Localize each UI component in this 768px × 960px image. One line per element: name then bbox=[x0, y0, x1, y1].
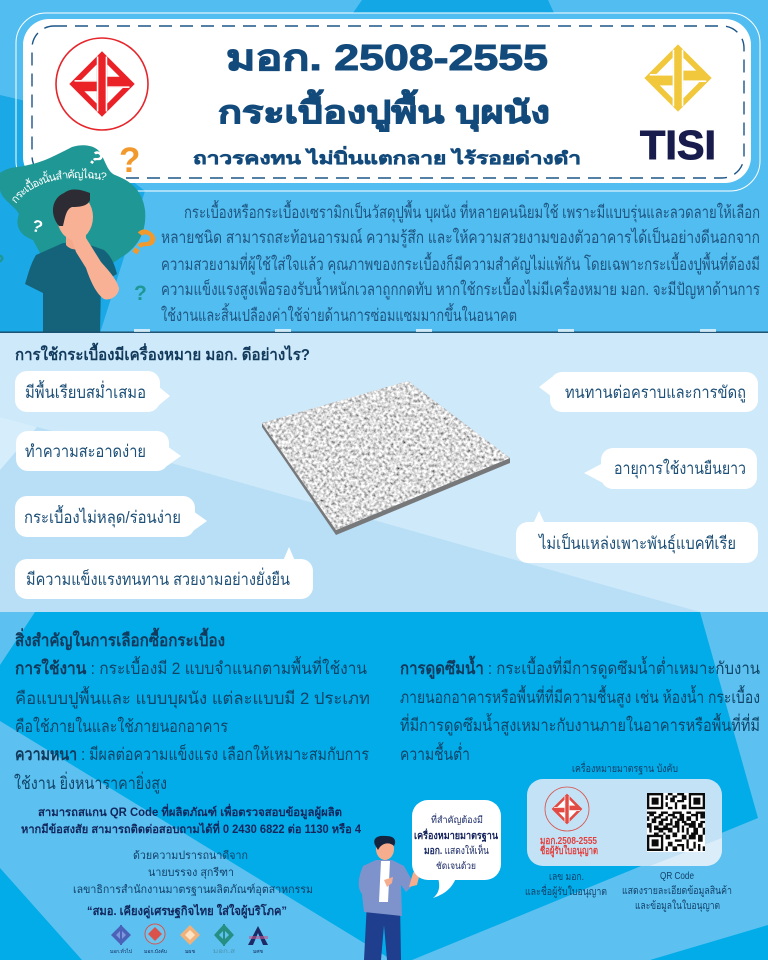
callout: not loose bbox=[15, 496, 207, 537]
text: water absorption: ความชื้นต่ำ bbox=[400, 742, 470, 764]
text: contact: สามารถสแกน QR Code ที่ผลิตภัณฑ์ เพื่อตรวจสอบข้อมูลผู้ผลิต bbox=[38, 803, 342, 820]
title bbox=[193, 37, 581, 168]
logo: mandatory mark in panel bbox=[545, 787, 589, 831]
logo: tower mark: มศช bbox=[253, 949, 264, 955]
logo: optional standard bbox=[110, 925, 132, 955]
licence text: ชื่อผู้รับใบอนุญาต bbox=[540, 843, 598, 858]
callout: no bacteria: ไม่เป็นแหล่งเพาะพันธุ์แบคทีเรีย bbox=[537, 532, 736, 554]
text: usage and thickness: การใช้งาน : กระเบื้องมี 2 แบบจำแนกตามพื้นที่ใช้งาน bbox=[15, 656, 367, 678]
pointing hand bbox=[409, 866, 420, 887]
image: terrazzo tile bbox=[255, 375, 517, 535]
logo: community standard bbox=[180, 925, 200, 955]
logo: mandatory standard bbox=[144, 924, 167, 955]
text: water absorption bbox=[400, 655, 760, 764]
panel: mark and QR code bbox=[527, 779, 722, 866]
text: signature: นายบรรจง สุกรีฑา bbox=[148, 866, 234, 879]
caption: licence number: และชื่อผู้รับใบอนุญาต bbox=[525, 884, 607, 898]
illustration: presenter man bbox=[359, 836, 420, 960]
text: contact: หากมีข้อสงสัย สามารถติดต่อสอบถามได้ที่ 0 2430 6822 ต่อ 1130 หรือ 4 bbox=[21, 820, 362, 836]
title: กระเบื้องปูพื้น บุผนัง bbox=[218, 89, 550, 132]
caption: QR code: และข้อมูลในใบอนุญาต bbox=[635, 899, 720, 912]
hair bbox=[53, 190, 90, 226]
illustration: thinking man with question blob bbox=[0, 145, 146, 332]
text: signature bbox=[73, 849, 313, 919]
speech bubble: ที่สำคัญต้องมี bbox=[431, 813, 483, 826]
heading: buying guide: สิ่งสำคัญในการเลือกซื้อกระเบื้อง bbox=[15, 627, 225, 651]
logo: red TISI mark bbox=[56, 38, 148, 130]
logo: green mark: มอก.ส bbox=[213, 948, 235, 955]
text: usage and thickness bbox=[14, 656, 370, 794]
white question top: ? bbox=[84, 146, 107, 171]
background: middle section bbox=[0, 329, 768, 612]
speech bubble: ชัดเจนด้วย bbox=[436, 861, 476, 872]
text: signature: “สมอ. เคียงคู่เศรษฐกิจไทย ใส่ใจผู้บริโภค” bbox=[87, 903, 287, 919]
blob bbox=[0, 145, 145, 290]
callout: easy to clean bbox=[16, 431, 181, 471]
caption: QR code: QR Code bbox=[660, 870, 694, 882]
logo: mandatory standard: มอก.บังคับ bbox=[144, 949, 167, 955]
shirt bbox=[379, 861, 390, 902]
neck bbox=[66, 225, 86, 249]
text: signature: ด้วยความปรารถนาดีจาก bbox=[133, 849, 248, 862]
title: มอก. 2508-2555 bbox=[226, 37, 548, 78]
callout: stain resistant bbox=[539, 372, 758, 412]
logo: green mark bbox=[213, 924, 235, 955]
QR code bbox=[647, 793, 705, 852]
question text on blob bbox=[16, 178, 108, 204]
callout: strong and lasting bbox=[15, 547, 313, 599]
callout: long lifetime bbox=[584, 448, 757, 489]
callout: no bacteria bbox=[516, 511, 758, 563]
icon: orange question rotated: ? bbox=[121, 220, 164, 267]
text: usage and thickness: คือใช้ภายในและใช้ภายนอกอาคาร bbox=[15, 716, 228, 736]
face bbox=[376, 838, 394, 860]
face bbox=[57, 194, 93, 240]
header panel bbox=[23, 19, 751, 183]
white question: ? bbox=[30, 216, 45, 237]
logo: gold TISI mark: TISI bbox=[640, 122, 716, 168]
callout: smooth surface bbox=[15, 371, 170, 412]
callout: easy to clean: ทำความสะอาดง่าย bbox=[25, 442, 146, 461]
intro paragraph: ใช้งานและสิ้นเปลืองค่าใช้จ่ายด้านการซ่อมแซมมากขึ้นในอนาคต bbox=[161, 303, 517, 325]
text: usage and thickness: ความหนา : มีผลต่อความแข็งแรง เลือกให้เหมาะสมกับการ bbox=[15, 743, 369, 764]
index hand bbox=[384, 877, 393, 887]
arm and hand bbox=[72, 234, 119, 299]
logo: tower mark bbox=[248, 926, 268, 955]
licence text bbox=[540, 836, 598, 858]
intro paragraph bbox=[161, 200, 760, 325]
callout: not loose: กระเบื้องไม่หลุด/ร่อนง่าย bbox=[24, 505, 181, 528]
heading: benefits: การใช้กระเบื้องมีเครื่องหมาย มอก. ดีอย่างไร? bbox=[15, 342, 310, 364]
header outer frame bbox=[16, 13, 760, 191]
speech bubble: มอก. แสดงให้เห็น bbox=[424, 843, 489, 857]
caption: licence number bbox=[525, 871, 607, 898]
callout: smooth surface: มีพื้นเรียบสม่ำเสมอ bbox=[25, 380, 146, 402]
jacket bbox=[359, 860, 414, 916]
callout: long lifetime: อายุการใช้งานยืนยาว bbox=[614, 458, 746, 479]
licence text: มอก.2508-2555 bbox=[540, 836, 597, 847]
icon: teal question: ? bbox=[134, 282, 147, 305]
illustration: thinking man with question blob: กระเบื้องนั้นสำคัญไฉน? bbox=[12, 168, 106, 204]
trousers bbox=[364, 902, 401, 960]
background: top section bbox=[0, 0, 768, 333]
label: compulsory standard mark: เครื่องหมายมาตรฐาน บังคับ bbox=[572, 761, 678, 775]
text: usage and thickness: ใช้งาน ยิ่งหนาราคายิ่งสูง bbox=[14, 771, 167, 794]
speech bubble: เครื่องหมายมาตรฐาน bbox=[414, 828, 498, 842]
shirt bbox=[25, 243, 117, 332]
caption: QR code: แสดงรายละเอียดข้อมูลสินค้า bbox=[622, 884, 732, 897]
logo: optional standard: มอก.ทั่วไป bbox=[110, 948, 132, 955]
caption: QR code bbox=[622, 870, 732, 912]
background: bottom section bbox=[0, 612, 768, 960]
icon: orange question mark: ? bbox=[119, 141, 140, 180]
logo: community standard: มผช bbox=[185, 949, 196, 955]
caption: licence number: เลข มอก. bbox=[549, 871, 584, 883]
logos row bbox=[110, 924, 268, 955]
callout: strong and lasting: มีความแข็งแรงทนทาน สวยงามอย่างยั่งยืน bbox=[26, 567, 290, 589]
title: ถาวรคงทน ไม่บิ่นแตกลาย ไร้รอยด่างดำ bbox=[193, 146, 581, 168]
logo: gold TISI mark bbox=[640, 44, 716, 168]
text: contact bbox=[21, 803, 362, 836]
text: signature: เลขาธิการสำนักงานมาตรฐานผลิตภัณฑ์อุตสาหกรรม bbox=[73, 883, 313, 896]
text: usage and thickness: คือแบบปูพื้นและ แบบบุผนัง แต่ละแบบมี 2 ประเภท bbox=[15, 686, 370, 709]
hair bbox=[374, 836, 395, 850]
speech bubble bbox=[412, 800, 501, 898]
